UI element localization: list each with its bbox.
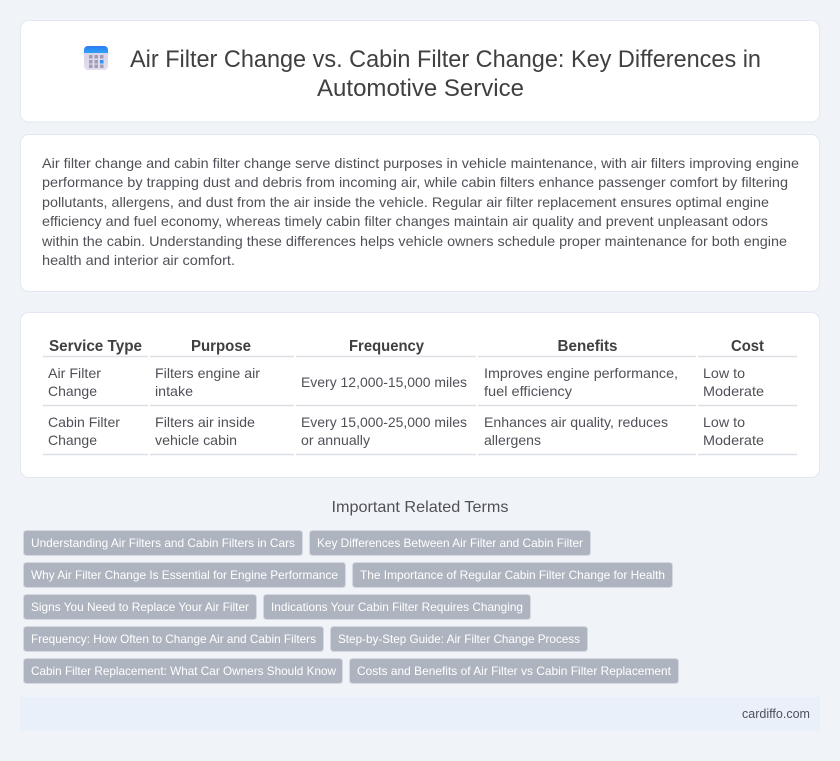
- panel: introduction: [20, 134, 820, 292]
- tag list: related terms: Cabin Filter Replacement: What Car Owners Should Know: [31, 664, 336, 678]
- table row: cabin filter change: vehicle cabin: [155, 432, 237, 448]
- table row: cabin filter change: Change: [48, 432, 97, 448]
- icon: calendar: [84, 46, 108, 70]
- table header: Frequency: [349, 338, 424, 355]
- table header: Cost: [731, 338, 765, 355]
- text block: introduction: pollutants, allergens, and dust from the air inside the vehicle. Regular air filter replacement ensures optimal engine: [42, 194, 769, 210]
- tag list: related terms: Frequency: How Often to Change Air and Cabin Filters: [31, 632, 316, 646]
- heading: related terms: Important Related Terms: [332, 499, 508, 516]
- table row: air filter change: Improves engine performance,: [484, 365, 678, 381]
- table row: air filter change: fuel efficiency: [484, 383, 572, 399]
- table header: Purpose: [191, 338, 251, 355]
- text block: introduction: efficiency and fuel economy, whereas timely cabin filter changes maintain air quality and prevent unpleasant odors: [42, 213, 768, 229]
- tag list: related terms: [24, 530, 678, 684]
- tag list: related terms: The Importance of Regular Cabin Filter Change for Health: [360, 568, 665, 582]
- tag list: related terms: Costs and Benefits of Air Filter vs Cabin Filter Replacement: [357, 664, 672, 678]
- table row: cabin filter change: Cabin Filter: [48, 414, 120, 430]
- tag list: related terms: Why Air Filter Change Is Essential for Engine Performance: [31, 568, 338, 582]
- panel: comparison table: [20, 312, 820, 478]
- table row: cabin filter change: Low to: [703, 414, 745, 430]
- table row: air filter change: intake: [155, 383, 193, 399]
- table row: cabin filter change: Moderate: [703, 432, 764, 448]
- table row: air filter change: Low to: [703, 365, 745, 381]
- tag list: related terms: Understanding Air Filters and Cabin Filters in Cars: [31, 536, 295, 550]
- title: Air Filter Change vs. Cabin Filter Change: Key Differences in: [130, 46, 761, 73]
- tag list: related terms: Step-by-Step Guide: Air Filter Change Process: [338, 632, 580, 646]
- table header: Benefits: [558, 338, 618, 355]
- table header: [49, 338, 765, 355]
- table row: air filter change: Change: [48, 383, 97, 399]
- table header: Service Type: [49, 338, 142, 355]
- table row: air filter change: Air Filter: [48, 365, 101, 381]
- footer: [20, 697, 820, 731]
- text block: introduction: Air filter change and cabin filter change serve distinct purposes in vehicle maintenance, with air filters improving engine: [42, 155, 799, 171]
- title: Automotive Service: [317, 75, 524, 102]
- tag list: related terms: Key Differences Between Air Filter and Cabin Filter: [317, 536, 583, 550]
- text block: introduction: performance by trapping dust and debris from incoming air, while cabin filters enhance passenger comfort by filtering: [42, 174, 788, 190]
- table row: cabin filter change: Enhances air quality, reduces: [484, 414, 668, 430]
- text block: introduction: within the cabin. Understanding these differences helps vehicle owners schedule proper maintenance for both engine: [41, 233, 787, 249]
- table row: cabin filter change: allergens: [484, 432, 541, 448]
- table row: air filter change: Every 12,000-15,000 miles: [301, 374, 467, 390]
- table row: air filter change: Moderate: [703, 383, 764, 399]
- text block: introduction: health and interior air comfort.: [42, 252, 235, 268]
- tag list: related terms: Indications Your Cabin Filter Requires Changing: [271, 600, 523, 614]
- table row: cabin filter change: or annually: [301, 432, 370, 448]
- table row: air filter change: Filters engine air: [155, 365, 260, 381]
- tag list: related terms: Signs You Need to Replace Your Air Filter: [31, 600, 249, 614]
- table row: cabin filter change: Every 15,000-25,000 miles: [301, 414, 467, 430]
- table row: cabin filter change: Filters air inside: [155, 414, 255, 430]
- table row: cabin filter change: [48, 414, 764, 448]
- panel: title header: [20, 20, 820, 122]
- footer: cardiffo.com: [742, 707, 810, 721]
- table row: air filter change: [48, 365, 764, 399]
